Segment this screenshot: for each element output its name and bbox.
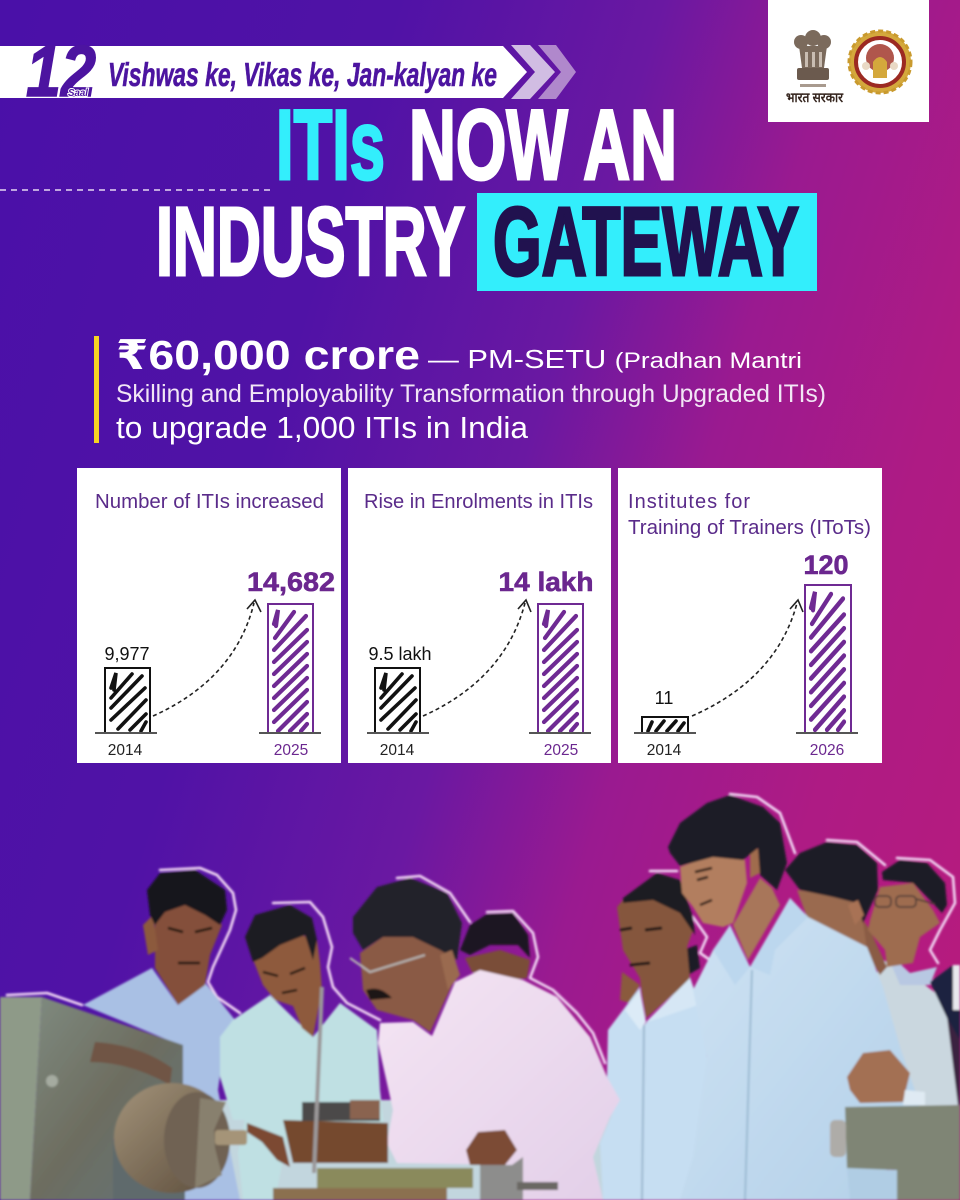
bar: 2025: 2025	[544, 742, 578, 759]
person: student in teal shirt	[220, 905, 384, 1200]
bar: 2025: 14 lakh	[498, 567, 594, 597]
icon: Madhya Pradesh seal	[849, 31, 911, 93]
highlight box: GATEWAY	[477, 187, 817, 296]
machine: right-hand vice	[830, 1105, 960, 1200]
machine: lathe chuck	[114, 1083, 247, 1193]
bar: 2014: 9,977	[104, 644, 150, 664]
cut-out outline	[7, 794, 955, 1063]
scheme line 2: Skilling and Employability Transformation through Upgraded ITIs)	[116, 380, 826, 408]
bar: 2025: 14,682	[247, 567, 335, 597]
scheme name: — PM-SETU (Pradhan Mantri	[428, 344, 802, 374]
heading: Number of ITIs increased	[95, 491, 324, 513]
bar: 2026: 120	[803, 550, 849, 580]
icon: national emblem	[794, 30, 831, 87]
person: tall student in front	[668, 795, 925, 1200]
bar: 2014: 2014	[647, 742, 682, 759]
person: left student	[83, 870, 240, 1200]
bar: 2014	[634, 688, 696, 759]
arrow	[153, 600, 261, 716]
bar: 2026: 2026	[810, 742, 844, 759]
title word: ITIs: ITIs	[276, 89, 385, 200]
arrow	[692, 600, 803, 716]
person: far right student with glasses	[863, 860, 960, 1110]
heading: Training of Trainers (IToTs)	[628, 517, 871, 539]
bar: 2025	[247, 567, 335, 759]
title word: INDUSTRY: INDUSTRY	[156, 187, 465, 296]
panel: ITOTs	[618, 468, 882, 763]
bar: 2025	[498, 567, 594, 759]
bar: 2026	[796, 550, 858, 759]
heading	[628, 491, 871, 539]
scheme line 3: to upgrade 1,000 ITIs in India	[116, 410, 529, 445]
banner chevrons	[511, 45, 576, 99]
highlight box: GATEWAY: GATEWAY	[493, 187, 799, 296]
banner ribbon	[0, 46, 527, 98]
Bharat Sarkar wordmark: भारत सरकार	[786, 90, 843, 105]
text block: PM-SETU description	[94, 332, 826, 445]
machine: tool post	[283, 987, 388, 1173]
logo panel	[768, 0, 929, 122]
person: student with face turned away	[785, 842, 878, 950]
accent bar	[94, 336, 99, 443]
amount: ₹60,000 crore	[116, 332, 420, 378]
arrow	[423, 600, 531, 716]
tagline: Vishwas ke, Vikas ke, Jan-kalyan ke	[108, 56, 497, 93]
panel: enrolments	[348, 468, 611, 763]
person: student behind trainer	[460, 913, 530, 982]
bar: 2014: 2014	[108, 742, 143, 759]
machine: lathe headstock	[0, 997, 185, 1200]
bar: 2025: 2025	[274, 742, 308, 759]
person: student behind, centre	[600, 873, 720, 1200]
bar: 2014: 9.5 lakh	[368, 644, 432, 664]
anniversary number: 12	[26, 32, 96, 112]
bar: 2014: 2014	[380, 742, 415, 759]
person: trainer	[350, 878, 620, 1200]
panel: number of ITIs	[77, 468, 341, 763]
machine: lathe bed	[273, 1157, 558, 1200]
Saal label: Saal	[68, 88, 88, 99]
bar: 2014	[95, 644, 157, 759]
photo: trainer and students at a lathe	[0, 794, 960, 1200]
banner: 12 Saal tagline	[0, 32, 576, 112]
bar: 2014: 11	[655, 688, 673, 708]
title words: NOW AN: NOW AN	[409, 89, 677, 200]
title	[156, 89, 817, 296]
photo backing behind the lower figures	[180, 1100, 620, 1200]
heading: Institutes for	[628, 491, 750, 513]
bar: 2014	[367, 644, 432, 759]
heading: Rise in Enrolments in ITIs	[364, 491, 593, 513]
